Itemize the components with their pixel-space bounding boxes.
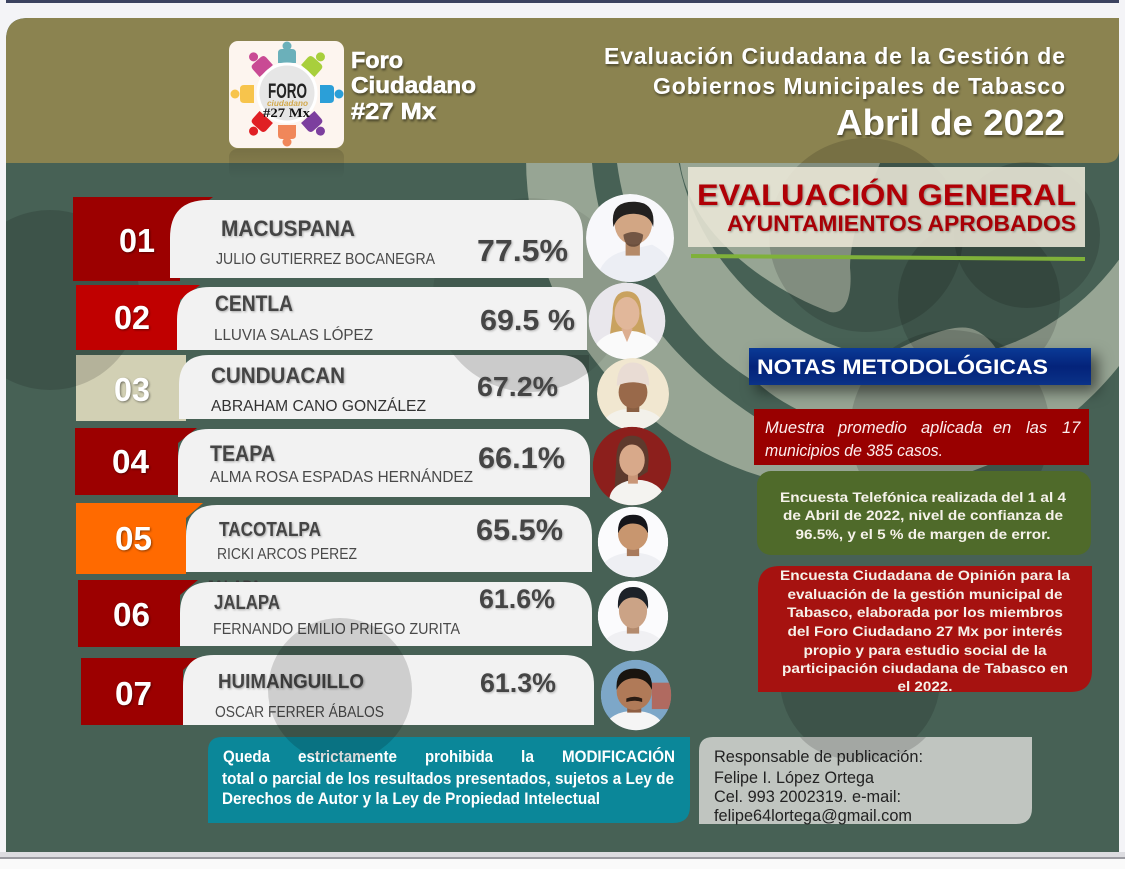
title box: evaluación general: AYUNTAMIENTOS APROBADOS <box>727 211 1076 236</box>
logo people ring <box>230 42 344 146</box>
note: encuesta telefónica: Encuesta Telefónica realizada del 1 al 4 <box>780 489 1066 505</box>
logo caption: Ciudadano <box>351 72 476 98</box>
portrait 03 <box>597 358 669 428</box>
row 06: JALAPA <box>214 592 280 614</box>
row 02: CENTLA <box>215 291 293 316</box>
row 07: 61.3% <box>480 668 556 698</box>
row 01: JULIO GUTIERREZ BOCANEGRA <box>216 251 435 268</box>
row 03: 03 <box>114 371 150 408</box>
note: encuesta ciudadana: del Foro Ciudadano 27 Mx por interés <box>788 623 1063 639</box>
logo: ciudadano <box>267 99 308 108</box>
note: encuesta telefónica <box>757 471 1091 555</box>
note: encuesta ciudadana <box>758 566 1092 694</box>
row 07: OSCAR FERRER ÁBALOS <box>215 702 384 721</box>
main heading: Evaluación Ciudadana de la Gestión de <box>604 43 1065 69</box>
overlay circles <box>268 618 926 762</box>
note: encuesta telefónica: de Abril de 2022, nivel de confianza de <box>783 507 1063 523</box>
row 01: 77.5% <box>477 233 568 268</box>
row 02 <box>76 285 587 350</box>
row 07: 07 <box>115 675 152 712</box>
responsible contact <box>699 737 1032 825</box>
responsible contact: felipe64lortega@gmail.com <box>714 806 912 825</box>
legal notice: la <box>521 747 534 766</box>
note: muestra: 17 <box>1062 419 1081 437</box>
logo: FORO <box>268 80 307 103</box>
row 03: 67.2% <box>477 371 558 402</box>
portrait 01 <box>586 194 674 282</box>
row 06 <box>78 577 592 647</box>
portrait 04 <box>592 426 672 506</box>
logo: #27 Mx <box>263 105 311 120</box>
note: muestra: promedio <box>837 419 907 437</box>
logo caption <box>351 47 476 124</box>
legal notice: MODIFICACIÓN <box>562 747 675 766</box>
legal notice: Derechos de Autor y la Ley de Propiedad Intelectual <box>222 789 600 808</box>
legal notice: Queda <box>223 747 270 766</box>
row 03: ABRAHAM CANO GONZÁLEZ <box>211 396 426 415</box>
responsible contact: Responsable de publicación: <box>714 747 923 766</box>
row 01 <box>73 197 583 281</box>
title box: evaluación general <box>688 167 1085 247</box>
row 02: 02 <box>114 299 150 336</box>
legal notice: estrictamente <box>298 747 397 766</box>
responsible contact: Cel. 993 2002319. e-mail: <box>714 787 901 806</box>
logo caption: #27 Mx <box>351 98 436 124</box>
main heading: Abril de 2022 <box>836 102 1065 143</box>
row 06: 06 <box>113 596 150 633</box>
row 06: FERNANDO EMILIO PRIEGO ZURITA <box>213 621 460 638</box>
note: encuesta ciudadana: Encuesta Ciudadana de Opinión para la <box>780 567 1070 583</box>
portrait 06 <box>598 580 668 652</box>
note: muestra: aplicada <box>921 419 982 437</box>
note: muestra: municipios de 385 casos. <box>765 442 943 460</box>
legal notice <box>208 737 690 823</box>
row 06: JALAPA <box>206 577 261 593</box>
row 04: 04 <box>112 443 150 480</box>
notas metodológicas heading: NOTAS METODOLÓGICAS <box>757 355 1048 379</box>
portrait 05 <box>598 506 668 578</box>
row 04: 66.1% <box>478 442 565 475</box>
note: encuesta ciudadana: el 2022. <box>898 678 952 694</box>
row 06: 61.6% <box>479 584 555 614</box>
row 05: 65.5% <box>476 514 563 547</box>
note: muestra: las <box>1026 419 1047 437</box>
background swirl <box>526 163 1119 476</box>
header band <box>6 18 1119 163</box>
translucent circles <box>0 138 1100 760</box>
logo caption: Foro <box>351 47 403 73</box>
title box: evaluación general: EVALUACIÓN GENERAL <box>697 178 1076 212</box>
row 04: ALMA ROSA ESPADAS HERNÁNDEZ <box>210 467 473 486</box>
note: encuesta ciudadana: participación ciudadana de Tabasco en <box>782 660 1068 676</box>
row 03: CUNDUACAN <box>211 363 345 388</box>
row 02: LLUVIA SALAS LÓPEZ <box>214 325 373 344</box>
note: encuesta ciudadana: propio y para estudio social de la <box>804 642 1047 658</box>
notas metodológicas heading <box>749 348 1091 385</box>
note: muestra <box>754 409 1089 465</box>
portrait 07 <box>600 660 672 730</box>
row 07 <box>81 655 594 725</box>
row 07: HUIMANGUILLO <box>218 671 364 693</box>
note: encuesta ciudadana: Tabasco, elaborada por los miembros <box>787 604 1063 620</box>
row 01: 01 <box>119 222 155 259</box>
row 05 <box>76 503 592 574</box>
main heading: Gobiernos Municipales de Tabasco <box>653 73 1065 99</box>
note: muestra: en <box>993 419 1011 437</box>
row 05: TACOTALPA <box>219 519 321 541</box>
portrait 02 <box>588 282 666 360</box>
logo <box>229 41 344 179</box>
row 01: MACUSPANA <box>221 216 355 241</box>
legal notice: total o parcial de los resultados presentados, sujetos a Ley de <box>222 769 674 788</box>
top browser strip <box>6 0 1119 3</box>
legal notice: prohibida <box>425 747 493 766</box>
green underline <box>691 254 1085 261</box>
row 03 <box>76 355 589 421</box>
note: encuesta ciudadana: evaluación de la gestión municipal de <box>788 586 1063 602</box>
bottom page edge <box>0 852 1125 869</box>
row 05: RICKI ARCOS PEREZ <box>217 546 357 563</box>
row 04 <box>75 428 590 497</box>
responsible contact: Felipe I. López Ortega <box>714 768 875 787</box>
note: muestra: Muestra <box>765 419 825 437</box>
main heading <box>604 43 1065 143</box>
row 05: 05 <box>115 520 152 557</box>
note: encuesta telefónica: 96.5%, y el 5 % de margen de error. <box>796 526 1050 542</box>
row 04: TEAPA <box>210 441 275 466</box>
row 02: 69.5 % <box>480 305 575 337</box>
